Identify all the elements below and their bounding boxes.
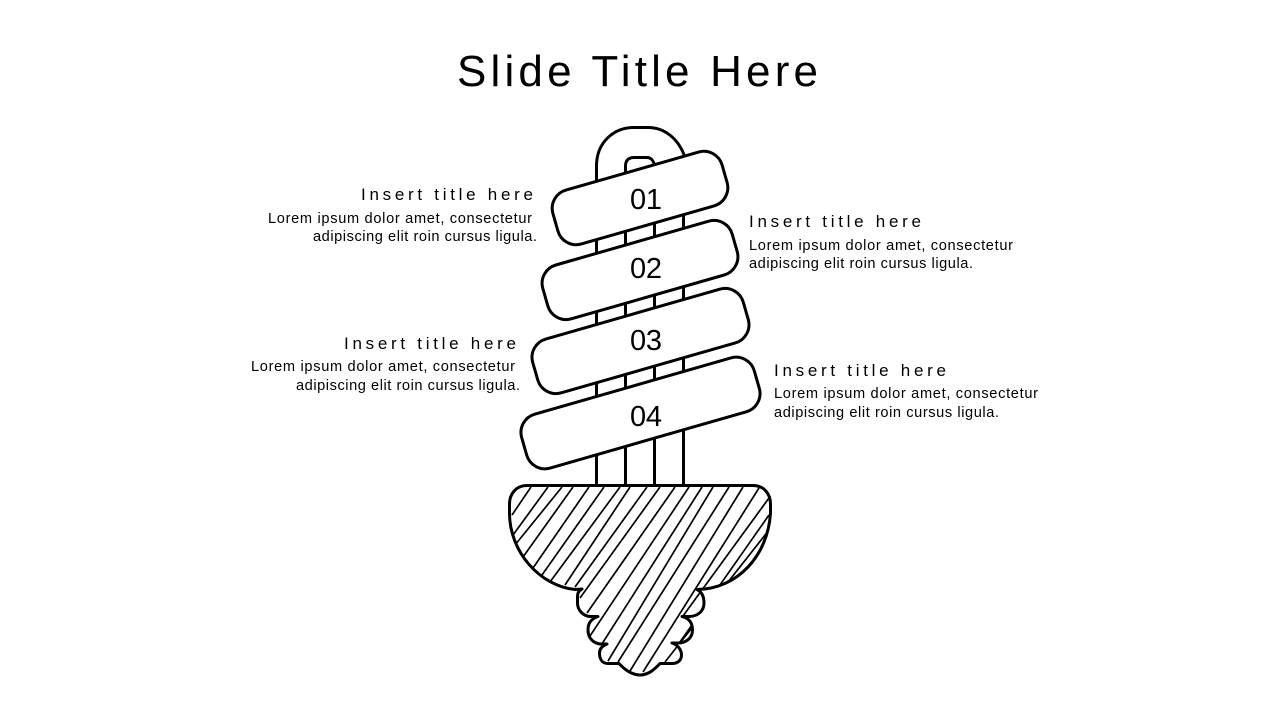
text block 02: Lorem ipsum dolor amet, consectetur xyxy=(749,238,1013,254)
text block 02: adipiscing elit roin cursus ligula. xyxy=(749,256,973,272)
text block 04: Insert title here xyxy=(774,361,946,380)
base: hatched bulb xyxy=(510,486,770,675)
text block 02: Insert title here xyxy=(749,212,921,231)
text block 04 xyxy=(774,361,1038,421)
text block 03: Lorem ipsum dolor amet, consectetur xyxy=(251,359,515,375)
bar 02 xyxy=(538,216,742,324)
text block 01: Lorem ipsum dolor amet, consectetur xyxy=(268,211,532,227)
spring rods and cap xyxy=(596,128,684,486)
text block 01: adipiscing elit roin cursus ligula. xyxy=(313,229,537,245)
bar 02: 02 xyxy=(630,253,662,285)
text block 02 xyxy=(749,212,1013,272)
text block 03 xyxy=(251,334,520,394)
title: Slide Title Here xyxy=(457,47,818,96)
bar 01: 01 xyxy=(630,184,662,216)
text block 03: Insert title here xyxy=(344,334,516,353)
bar 03 xyxy=(528,284,753,398)
bar 04: 04 xyxy=(630,401,662,433)
text block 01 xyxy=(268,185,537,245)
bar 04 xyxy=(516,353,765,473)
text block 03: adipiscing elit roin cursus ligula. xyxy=(296,378,520,394)
text block 01: Insert title here xyxy=(361,185,533,204)
text block 04: Lorem ipsum dolor amet, consectetur xyxy=(774,386,1038,402)
bar 01 xyxy=(548,147,732,249)
bar 03: 03 xyxy=(630,325,662,357)
text block 04: adipiscing elit roin cursus ligula. xyxy=(774,405,999,421)
